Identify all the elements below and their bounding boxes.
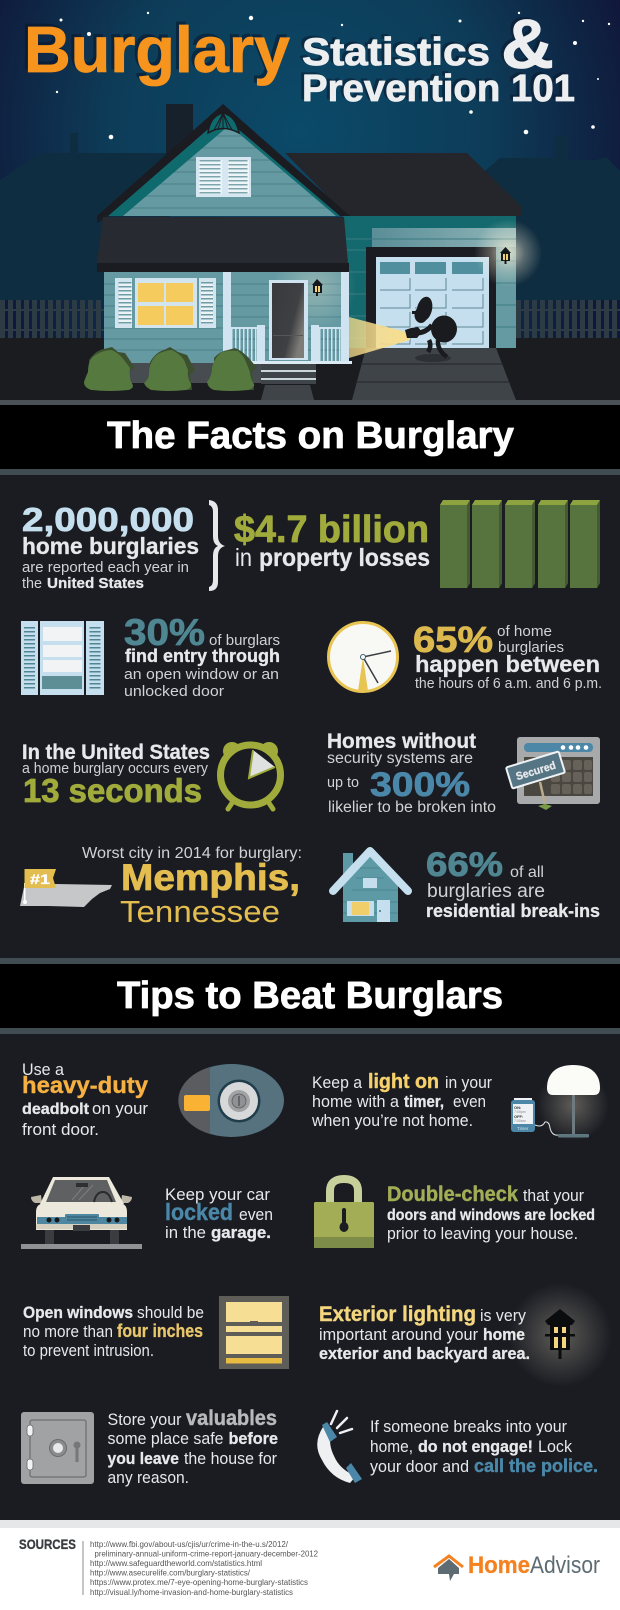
fact: 30%: 30% [124,612,205,653]
tip: heavy-duty deadbolt: deadbolt [22,1101,90,1118]
flashlight beam [349,317,410,358]
tip: exterior lighting: Exterior lighting [319,1303,476,1326]
tip: heavy-duty deadbolt [22,1060,148,1139]
tip: exterior lighting: exterior and backyard area. [319,1344,530,1363]
bushes [84,347,257,391]
driveway [352,348,516,400]
fact: 300%: 300% [370,766,470,804]
tip: do not engage, call the police: If someone breaks into your [370,1417,567,1436]
tip: light on with a timer: in your [445,1073,492,1092]
fact: 66%: residential break-ins [426,901,600,921]
icon: clock [328,622,398,692]
icon: padlock [314,1179,374,1248]
fact: 300%: security systems are [327,750,473,767]
tip: do not engage, call the police: do not engage! [418,1437,533,1456]
source links: http://www.fbi.gov/about-us/cjis/ur/crime-in-the-u.s/2012/ [90,1540,289,1549]
tip: store your valuables: some place safe [108,1429,224,1448]
fact: 13 seconds: 13 seconds [23,772,202,809]
fact: 65% [413,619,602,692]
title subtitle: & [501,5,554,83]
sidewalk strip [0,400,620,405]
fact: 30%: of burglars [209,632,280,649]
tip: double-check doors and windows: Double-check [387,1183,518,1206]
tip: keep your car locked: Keep your car [165,1185,270,1204]
tip: open windows four inches: no more than [23,1322,113,1341]
tip: do not engage, call the police [370,1417,598,1476]
tip: double-check doors and windows: prior to leaving your house. [387,1224,578,1243]
icon: security keypad and sign [506,737,600,810]
icon: money stacks [440,500,600,588]
gable wall [107,117,342,216]
fact: $4.7 billion: property losses [259,544,430,572]
fact: 65%: of home [497,623,552,640]
tip: double-check doors and windows: that your [523,1186,584,1205]
icon: exterior lantern [508,1283,612,1387]
tip: exterior lighting [319,1303,530,1363]
tip: open windows four inches: four inches [117,1321,203,1341]
fact: 66% [426,846,600,921]
tip: do not engage, call the police: home, [370,1437,413,1456]
tip: keep your car locked: garage. [211,1223,271,1242]
foundation [104,363,262,383]
garage lit area [372,228,516,248]
tip: store your valuables: the house for [184,1449,277,1468]
chimney [166,104,193,164]
tip: store your valuables: any reason. [108,1468,189,1487]
fact: 30%: unlocked door [124,683,224,700]
timer labels: 7:00am [514,1119,526,1123]
source links: http://www.safeguardtheworld.com/statistics.html [90,1559,262,1568]
icon: deadbolt [178,1064,284,1137]
background house silhouettes [0,133,620,300]
timer labels: OFF: [514,1114,523,1119]
source links: https://www.protex.me/7-eye-opening-home-burglary-statistics [90,1578,308,1587]
main siding [104,284,348,350]
title subtitle: Statistics [302,31,490,74]
tip: do not engage, call the police: call the police. [474,1456,598,1476]
icon: open window with shutters [21,621,104,695]
stars [56,12,610,139]
tip: store your valuables: Store your [108,1410,182,1429]
icon: safe [21,1412,94,1484]
fact: 13 seconds: a home burglary occurs every [22,760,208,777]
title subtitle: Prevention 101 [302,68,575,110]
garage siding [343,239,516,338]
tip: light on with a timer: home with a [312,1092,400,1111]
fact: 2,000,000 home burglaries: United States [47,575,144,592]
source links [90,1540,319,1597]
fact: Memphis, Tennessee: Memphis, [121,857,300,898]
garage roof [285,153,522,216]
tip: heavy-duty deadbolt: heavy-duty [22,1072,148,1098]
heading: Tips to Beat Burglars: Tips to Beat Burglars [117,975,503,1017]
attic window [196,157,251,197]
icon: house [333,851,408,922]
fact: 2,000,000 home burglaries: 2,000,000 [22,501,194,538]
fact: 66%: burglaries are [427,881,545,902]
tip: open windows four inches: to prevent intrusion. [23,1341,154,1360]
garage lantern glow [474,219,542,287]
fact: 13 seconds [22,741,210,809]
section band: tips [0,958,620,1034]
fact: 65%: the hours of 6 a.m. and 6 p.m. [415,676,602,692]
tip: light on with a timer: even [453,1092,486,1111]
front door [269,280,308,360]
fact: 300% [327,730,496,816]
tip: heavy-duty deadbolt: Use a [22,1060,65,1079]
porch lantern [312,279,323,296]
fact: 65%: burglaries [498,639,564,656]
steps [261,364,316,400]
tip: double-check doors and windows: doors and windows are locked [387,1207,595,1224]
tip: exterior lighting: is very [480,1306,526,1325]
main wall [104,272,348,363]
garage door frame [366,247,496,348]
tip: store your valuables: valuables [186,1407,277,1430]
fact: 65%: happen between [415,651,600,677]
lit window with shutters [115,278,216,328]
tip: light on with a timer: when you’re not home. [311,1111,473,1130]
icon: lamp and timer [511,1065,609,1141]
tip: keep your car locked: in the [165,1223,206,1242]
sources label: SOURCES [19,1536,76,1552]
tip: heavy-duty deadbolt: front door. [22,1120,99,1139]
tip: light on with a timer: Keep a [312,1073,362,1092]
tip: keep your car locked: even [239,1205,273,1224]
tip: keep your car locked [165,1185,273,1242]
icon: car in garage [21,1177,142,1249]
tip: do not engage, call the police: Lock [538,1437,572,1456]
source links: preliminary-annual-uniform-crime-report-january-december-2012 [94,1550,319,1558]
fact: Memphis, Tennessee: Worst city in 2014 for burglary: [82,845,302,862]
tip: light on with a timer: light on [368,1071,439,1093]
fact: 300%: Homes without [327,730,476,753]
brace [209,500,225,591]
icon: Tennessee map with flag [20,869,112,907]
tip: double-check doors and windows [387,1183,595,1243]
fact: 30% [124,612,280,700]
title [24,5,575,110]
fact: Memphis, Tennessee: Tennessee [120,894,280,929]
fence [0,310,620,330]
shell vent [208,113,239,133]
porch railings [231,325,341,362]
tip: store your valuables [108,1407,278,1487]
icon: alarm clock [220,742,280,809]
fact: 2,000,000 home burglaries [22,501,199,592]
fact: 300%: likelier to be broken into [328,799,496,816]
fact: 66%: 66% [426,846,503,884]
timer labels: ON: [514,1105,521,1110]
night sky [0,0,620,340]
fact: 30%: an open window or an [124,666,279,683]
fact: 2,000,000 home burglaries: are reported each year in [22,559,189,576]
gable roof edge [97,104,350,223]
tip: open windows four inches [23,1303,204,1360]
fact: 30%: find entry through [125,646,280,666]
fact: 13 seconds: In the United States [22,741,210,764]
heading: The Facts on Burglary: The Facts on Burglary [107,415,514,457]
title subtitle [302,5,575,110]
fact: $4.7 billion: in [235,544,252,572]
logo: HomeAdvisor [434,1552,600,1581]
tip: light on with a timer [311,1071,492,1130]
icon: Tennessee map with flag: #1 [30,871,50,887]
garage lantern [500,247,511,264]
fact: $4.7 billion [234,509,430,572]
timer labels: 7:00pm [514,1110,526,1114]
source links: http://www.asecurelife.com/burglary-statistics/ [90,1568,251,1578]
house [84,104,542,400]
garage wall [343,216,516,348]
fact: 300%: up to [327,774,359,791]
porch columns [223,272,231,362]
ground [0,338,620,400]
fact: 2,000,000 home burglaries: the [22,575,42,592]
fact: 66%: of all [510,864,544,881]
sign: Secured: Secured [515,760,557,783]
porch light wash [273,245,357,329]
tip: open windows four inches: Open windows [23,1303,133,1322]
icon: ringing phone [317,1411,362,1483]
section band: facts [0,405,620,475]
fact: 65%: 65% [413,619,493,660]
tip: store your valuables: before [228,1429,278,1448]
icon: window four inches open [219,1296,289,1369]
porch roof [97,217,348,263]
logo: HomeAdvisor: Advisor [530,1552,600,1579]
tip: exterior lighting: important around your [319,1325,478,1344]
logo: HomeAdvisor: Home [468,1552,530,1579]
tip: exterior lighting: home [483,1325,525,1344]
tip: open windows four inches: should be [137,1303,204,1322]
title word: Burglary: Burglary [24,13,290,86]
gable siding [108,129,340,216]
fact: 2,000,000 home burglaries: home burglaries [22,533,199,559]
tip: light on with a timer: timer, [404,1092,444,1111]
porch floor [251,361,352,364]
tip: store your valuables: you leave [108,1449,179,1468]
fact: $4.7 billion: $4.7 billion [234,509,429,551]
tip: heavy-duty deadbolt: on your [92,1099,148,1118]
fact: Memphis, Tennessee [82,845,302,929]
timer labels [514,1105,529,1131]
burglar [405,295,457,362]
panel: header scene [0,0,620,405]
timer labels: Timer [517,1126,529,1131]
tip: keep your car locked: locked [165,1199,233,1225]
source links: http://visual.ly/home-invasion-and-home-burglary-statistics [90,1588,293,1597]
garage door [376,257,489,348]
porch eave [97,263,349,272]
panel: footer [0,1520,620,1610]
tip: do not engage, call the police: your door and [370,1457,469,1476]
